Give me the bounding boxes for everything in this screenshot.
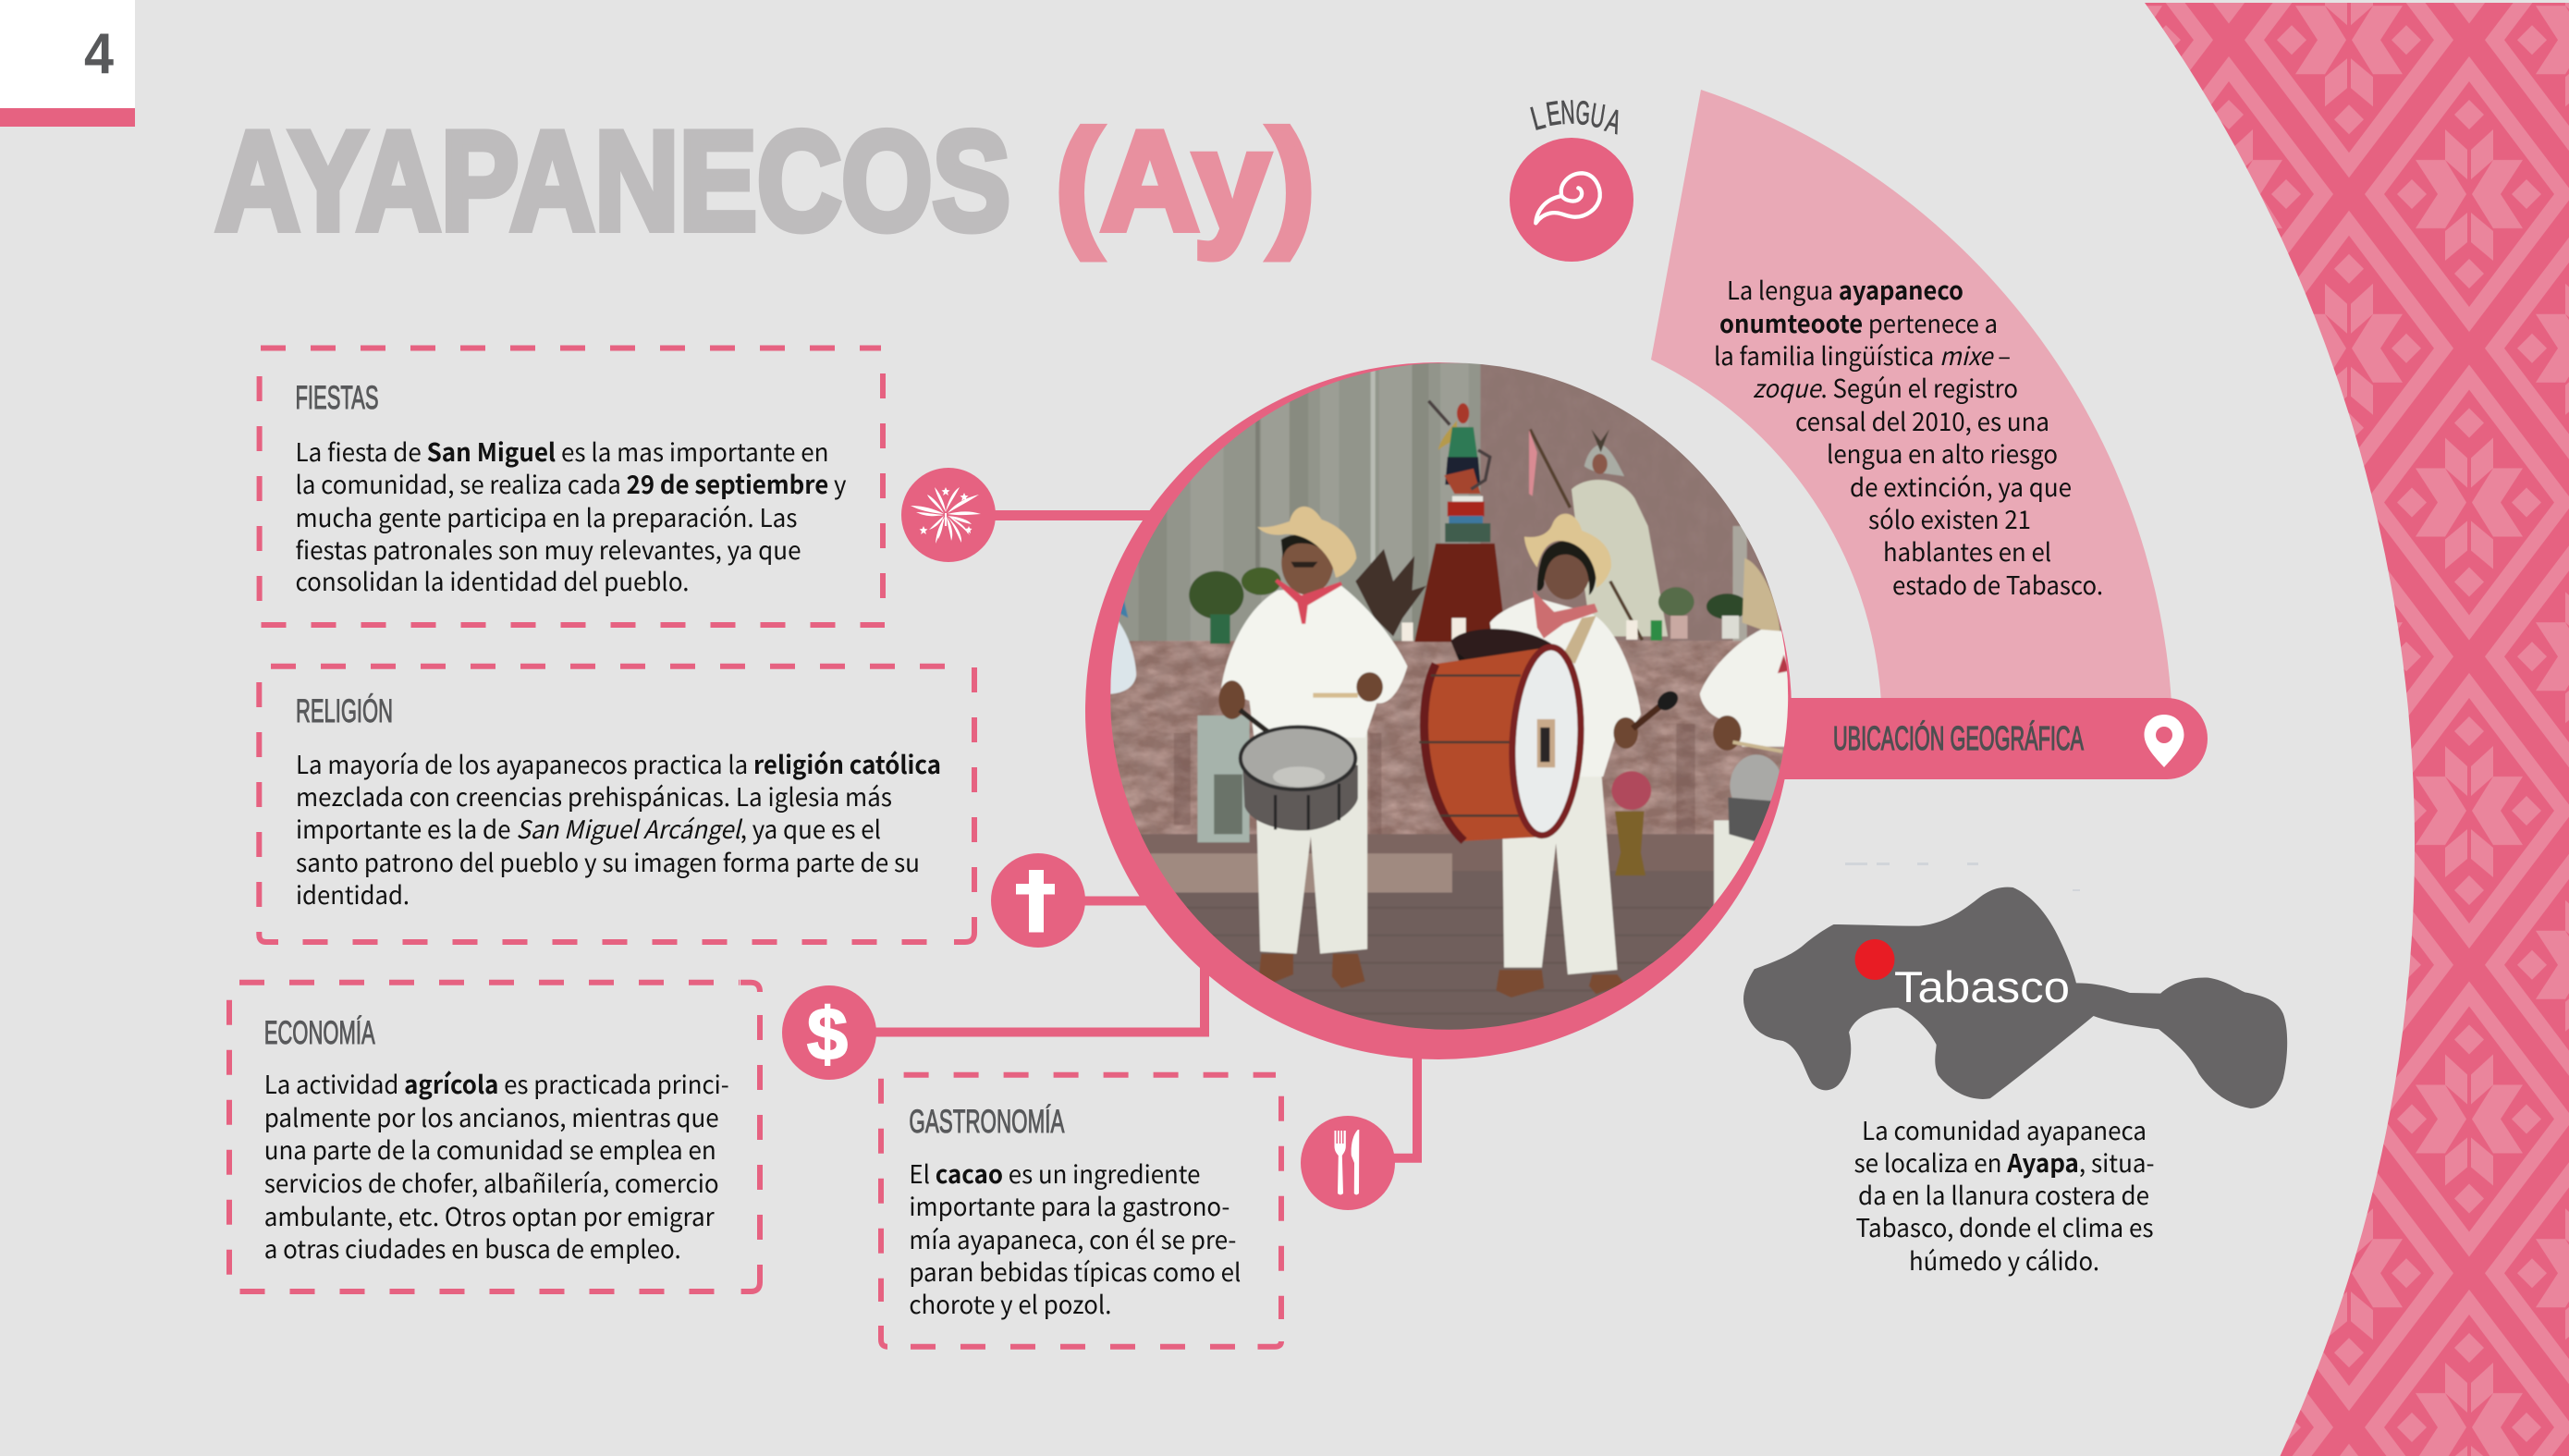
bench xyxy=(1197,716,1250,842)
text: fiestas body xyxy=(296,433,847,598)
text: gastronomia body: importante para la gastrono- xyxy=(909,1187,1229,1223)
lengua text: hablantes en el xyxy=(1883,532,2051,569)
right musician xyxy=(1700,558,1790,908)
text: ubicacion description: da en la llanura costera de xyxy=(1858,1176,2149,1212)
panel: fiestas xyxy=(260,348,885,625)
text: religion body: mezclada con creencias prehispánicas. La iglesia más xyxy=(296,777,892,814)
map of Tabasco: Tabasco xyxy=(1894,962,2070,1011)
page number tab: 4 xyxy=(84,22,114,86)
panel: ubicacion geografica bar xyxy=(1710,698,2208,779)
icon: map pin xyxy=(2145,715,2184,767)
lengua text: de extinción, ya que xyxy=(1850,468,2072,504)
right rose wall xyxy=(1481,362,1788,645)
connectors between icons and central photo xyxy=(874,516,1417,1158)
title: (Ay) xyxy=(1056,103,1315,260)
left grey wall xyxy=(1110,362,1481,650)
panel: ubicacion geografica bar: UBICACIÓN GEOGRÁFICA xyxy=(1833,719,2084,757)
text: gastronomia body: El cacao es un ingrediente xyxy=(909,1155,1200,1191)
lengua text: la familia lingüística mixe – xyxy=(1714,336,2011,373)
text: ubicacion description: húmedo y cálido. xyxy=(1909,1242,2099,1278)
icon: lengua speech swirl with arched label: A xyxy=(1602,103,1625,141)
text: economia body xyxy=(264,1065,729,1266)
icon: cross xyxy=(991,853,1085,948)
text: gastronomia body: chorote y el pozol. xyxy=(909,1285,1111,1321)
icon: lengua speech swirl with arched label: G xyxy=(1575,95,1591,132)
text: fiestas body: fiestas patronales son muy relevantes, ya que xyxy=(296,531,801,567)
text: gastronomia body xyxy=(909,1155,1241,1321)
icon: dollar: $ xyxy=(807,993,848,1075)
lengua text xyxy=(1714,271,2103,602)
icon: lengua speech swirl with arched label: L xyxy=(1527,98,1548,138)
text: economia body: a otras ciudades en busca de empleo. xyxy=(264,1230,681,1266)
text: religion body: santo patrono del pueblo y su imagen forma parte de su xyxy=(296,843,920,879)
lengua text: zoque. Según el registro xyxy=(1753,369,2018,405)
heading: religion: RELIGIÓN xyxy=(296,693,393,729)
text: religion body: importante es la de San Miguel Arcángel, ya que es el xyxy=(296,810,881,846)
icon: fork and knife xyxy=(1301,1116,1395,1210)
icon: lengua speech swirl with arched label: U xyxy=(1588,97,1608,136)
text: fiestas body: mucha gente participa en la preparación. Las xyxy=(296,498,797,534)
panel: religion xyxy=(259,667,974,942)
panel: gastronomia xyxy=(881,1075,1281,1347)
text: ubicacion description: Tabasco, donde el clima es xyxy=(1856,1208,2154,1244)
marble base xyxy=(1110,641,1790,838)
lengua text: La lengua ayapaneco xyxy=(1727,271,1963,307)
lengua text: sólo existen 21 xyxy=(1868,500,2031,536)
text: fiestas body: consolidan la identidad del pueblo. xyxy=(296,562,690,598)
heading: economia: ECONOMÍA xyxy=(264,1015,375,1051)
icon: fireworks xyxy=(901,468,996,562)
page number tab xyxy=(0,0,135,127)
white virgin statue xyxy=(1529,430,1668,640)
panel: lengua fan xyxy=(1651,90,2171,703)
icon: dollar xyxy=(782,985,876,1080)
lengua text: censal del 2010, es una xyxy=(1795,402,2049,438)
icon: lengua speech swirl with arched label: E xyxy=(1544,95,1563,133)
musician one xyxy=(1218,507,1407,988)
text: fiestas body: La fiesta de San Miguel es la mas importante en xyxy=(296,433,828,469)
icon: lengua speech swirl with arched label xyxy=(1510,93,1633,262)
marker: Ayapa xyxy=(1854,939,1895,980)
heading: gastronomia: GASTRONOMÍA xyxy=(909,1104,1065,1140)
text: gastronomia body: paran bebidas típicas como el xyxy=(909,1253,1241,1289)
text: religion body xyxy=(296,745,941,912)
decorative textile pattern band xyxy=(2145,3,2569,1456)
text: economia body: una parte de la comunidad se emplea en xyxy=(264,1131,716,1167)
text: fiestas body: la comunidad, se realiza cada 29 de septiembre y xyxy=(296,465,847,501)
text: ubicacion description: se localiza en Ayapa, situa- xyxy=(1854,1144,2154,1180)
flower vase xyxy=(1611,771,1651,875)
photo: musicians with drums in a church xyxy=(1110,362,1790,1032)
lengua text: estado de Tabasco. xyxy=(1892,566,2103,602)
icon: lengua speech swirl with arched label: N xyxy=(1560,93,1576,132)
text: economia body: servicios de chofer, albañilería, comercio xyxy=(264,1164,719,1200)
title: AYAPANECOS xyxy=(215,103,1010,260)
central photo ring xyxy=(1085,362,1792,1059)
altar pedestal xyxy=(1414,496,1507,642)
heading: fiestas: FIESTAS xyxy=(296,380,379,416)
panel: economia xyxy=(229,983,760,1291)
musician two xyxy=(1490,514,1682,997)
lengua text: lengua en alto riesgo xyxy=(1827,434,2058,471)
text: ubicacion description: La comunidad ayapaneca xyxy=(1862,1111,2147,1147)
map of Tabasco xyxy=(1743,863,2287,1108)
step and floor xyxy=(1141,834,1715,872)
text: religion body: La mayoría de los ayapanecos practica la religión católica xyxy=(296,745,941,781)
bass drum xyxy=(1419,629,1585,841)
text: gastronomia body: mía ayapaneca, con él se pre- xyxy=(909,1220,1236,1256)
text: economia body: palmente por los ancianos, mientras que xyxy=(264,1098,719,1134)
candles xyxy=(1401,618,1662,641)
text: religion body: identidad. xyxy=(296,875,410,912)
text: economia body: La actividad agrícola es practicada princi- xyxy=(264,1065,729,1101)
lengua text: onumteoote pertenece a xyxy=(1719,304,1998,340)
left person xyxy=(1110,614,1136,694)
text: ubicacion description xyxy=(1854,1111,2154,1278)
altar plants xyxy=(1189,549,1748,643)
text: economia body: ambulante, etc. Otros optan por emigrar xyxy=(264,1197,715,1233)
archangel statue xyxy=(1428,401,1490,494)
